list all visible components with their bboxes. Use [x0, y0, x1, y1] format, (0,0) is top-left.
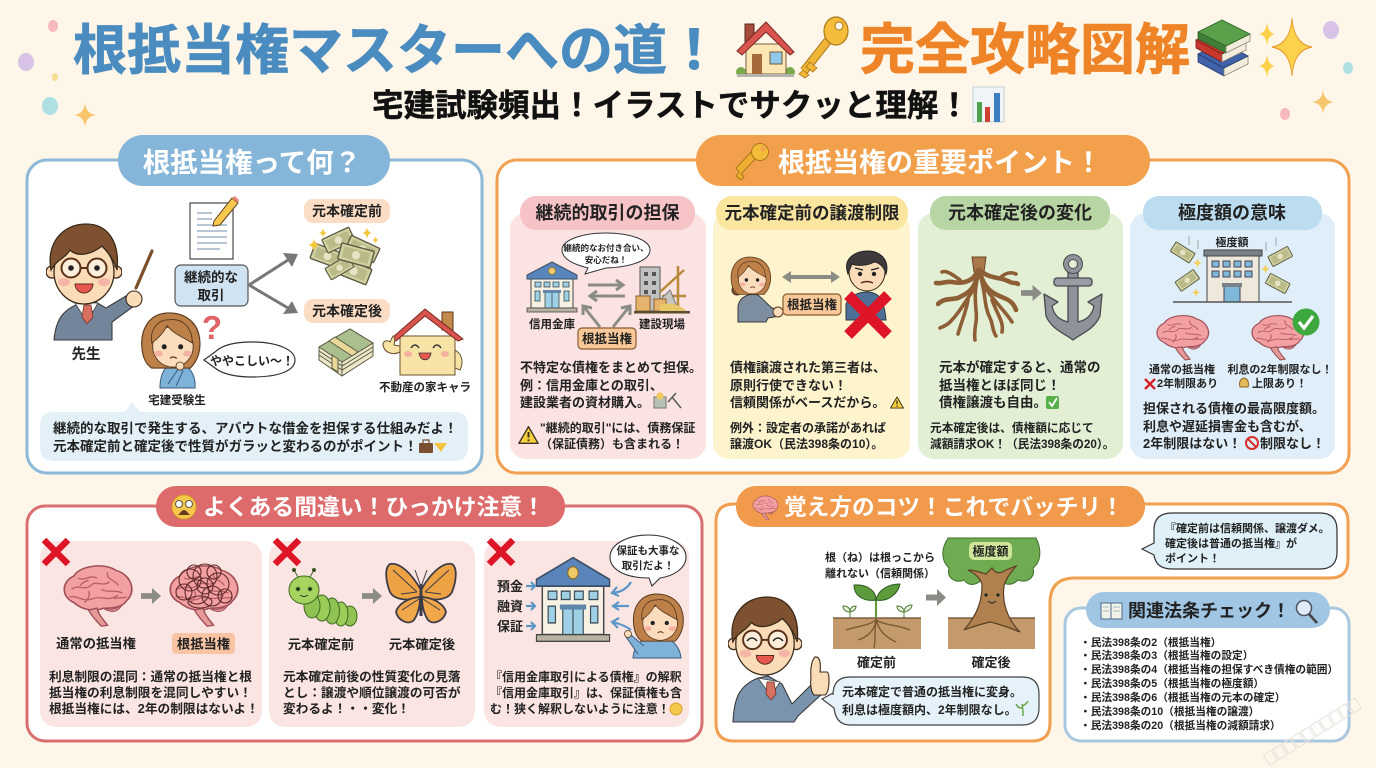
watermark	[1263, 698, 1361, 765]
background decorations: dots and stars	[18, 20, 1353, 127]
icon: brain	[753, 496, 778, 520]
illustration: seedling	[833, 584, 921, 670]
comparison labels: 利息の2年制限なし！	[1227, 362, 1333, 376]
speech bubble: 安心だね！	[585, 255, 627, 265]
icon: sparkles	[1259, 18, 1312, 78]
character: house mascot	[379, 309, 471, 394]
icon: warning	[891, 397, 903, 408]
labels: deposit, loan, guarantee: 保証	[497, 619, 523, 634]
panel: memory tips	[716, 486, 1348, 741]
panel: what is a revolving mortgage	[27, 135, 482, 473]
explanation callout: 元本確定前と確定後で性質がガラッと変わるのがポイント！	[53, 438, 418, 454]
icon: brain, normal	[1157, 316, 1209, 360]
law list: ・民法398条の2（根抵当権）	[1080, 636, 1221, 649]
card: security for continuous transactions: 信用金庫	[529, 317, 575, 331]
labels: deposit, loan, guarantee: 融資	[497, 599, 523, 614]
body text: 担保される債権の最高限度額。	[1143, 401, 1325, 416]
speech bubble: guarantee too: 保証も大事な	[616, 544, 680, 557]
label: after principal fixed	[304, 299, 390, 323]
arrow	[926, 589, 946, 606]
label: revolving mortgage	[578, 328, 636, 349]
body text: 『信用金庫取引』は、保証債権も含	[490, 685, 682, 700]
panel: key points	[497, 135, 1349, 473]
law list: ・民法398条の4（根抵当権の担保すべき債権の範囲）	[1080, 663, 1338, 676]
arrow	[1021, 285, 1042, 301]
label: revolving mortgage	[172, 633, 235, 654]
warning note: "継続的取引"には、債務保証	[540, 420, 695, 435]
label: mnemonic: 離れない（信頼関係）	[825, 566, 935, 580]
body text: とし：譲渡や順位譲渡の可否が	[283, 685, 461, 700]
title	[73, 17, 1312, 81]
character: confused student	[142, 309, 222, 407]
icon: books	[1196, 20, 1250, 76]
body text	[49, 669, 259, 716]
body text	[490, 669, 682, 716]
card: meaning of maximum amount: 極度額の意味	[1178, 203, 1286, 223]
card: interest limit confusion	[40, 540, 262, 727]
teacher with pointer: 先生	[72, 346, 100, 363]
card: change after principal fixed: 元本確定後の変化	[948, 203, 1092, 223]
icon: butterfly	[386, 564, 456, 622]
illustration: seedling: 確定前	[857, 655, 896, 670]
speech bubble: guarantee too: 取引だよ！	[622, 559, 674, 572]
card: transfer limits before principal fixed: 元本確定前の譲渡制限	[724, 203, 900, 223]
body text: 根抵当権には、2年の制限はないよ！	[49, 701, 259, 716]
body text: 抵当権とほぼ同じ！	[939, 377, 1060, 393]
icon: construction site	[634, 266, 690, 314]
card: scope of credit union transactions	[484, 535, 689, 727]
subtitle: 宅建試験頻出！イラストでサクッと理解！	[372, 87, 970, 123]
illustration: big tree: 確定後	[971, 655, 1011, 670]
exception note: 例外：設定者の承諾があれば	[730, 420, 886, 435]
icon: open book	[1101, 603, 1122, 619]
heading pill	[118, 135, 390, 186]
title: 根抵当権マスターへの道！	[73, 21, 721, 81]
labels: deposit, loan, guarantee	[497, 579, 523, 634]
heading pill: 根抵当権って何？	[143, 147, 361, 178]
label: before principal fixed	[304, 199, 390, 223]
body text: 元本確定前後の性質変化の見落	[283, 669, 461, 684]
icon: magnifier	[1296, 600, 1317, 623]
body text: 2年制限はない！	[1143, 436, 1241, 451]
title: 完全攻略図解	[860, 19, 1190, 81]
law list: ・民法398条の3（根抵当権の設定）	[1080, 649, 1253, 662]
card: change after principal fixed	[918, 196, 1123, 459]
warning note	[519, 420, 695, 451]
icon: bank and pickaxe	[654, 392, 681, 408]
body text: 『信用金庫取引による債権』の解釈	[490, 669, 682, 684]
heading pill	[156, 486, 565, 527]
speech bubble: so confusing: ややこしい〜！	[210, 354, 294, 368]
speech bubble: 継続的なお付き合い、	[563, 243, 649, 253]
icon: bank	[536, 558, 610, 641]
icon: prohibited	[1246, 437, 1258, 449]
explanation callout: 継続的な取引で発生する、アバウトな借金を担保する仕組みだよ！	[53, 420, 457, 436]
comparison labels	[1145, 362, 1333, 390]
arrow	[141, 588, 161, 604]
icon: brain with check	[1252, 308, 1320, 360]
arrows: into bank	[526, 582, 631, 630]
label: before principal fixed: 元本確定前	[312, 203, 382, 219]
arrows: split into before and after	[249, 253, 298, 314]
icon: caterpillar	[289, 568, 357, 626]
box: continuous transactions	[175, 265, 248, 306]
icon: key	[799, 17, 848, 78]
label: revolving mortgage: 根抵当権	[582, 331, 632, 346]
card: transfer limits before principal fixed	[713, 196, 910, 459]
body text: 原則行使できない！	[730, 378, 847, 393]
body text: 建設業者の資材購入。	[520, 395, 650, 410]
card: security for continuous transactions: 建設現場	[639, 317, 685, 331]
card: meaning of maximum amount	[1130, 196, 1335, 459]
arrows: two-way	[588, 280, 625, 301]
body text: 債権譲渡も自由。	[939, 394, 1047, 410]
icon: red X	[44, 540, 68, 564]
body text	[520, 360, 702, 410]
heading pill: 根抵当権の重要ポイント！	[778, 148, 1102, 178]
comparison labels: 通常の抵当権	[1149, 362, 1215, 376]
icon: roots	[936, 257, 1018, 340]
note text: 減額請求OK！（民法398条の20）。	[930, 437, 1114, 451]
icon: stack of banknotes	[319, 329, 373, 376]
speech bubble	[562, 233, 650, 274]
heading pill	[696, 135, 1150, 186]
body text	[730, 360, 886, 410]
speech bubble: teacher summary: 元本確定で普通の抵当権に変身。	[842, 684, 1022, 699]
icon: key	[736, 144, 768, 180]
speech bubble: so confusing	[204, 342, 295, 377]
teacher thumbs up	[728, 597, 829, 722]
label: maximum amount: 極度額	[972, 544, 1009, 558]
warning note: （保証債務）も含まれる！	[540, 436, 684, 451]
note text: 元本確定後は、債権額に応じて	[930, 421, 1094, 435]
body text: 利息制限の混同：通常の抵当権と根	[49, 669, 252, 684]
icon: anchor	[1044, 254, 1102, 340]
speech bubble: key point	[1142, 513, 1337, 569]
speech bubble: teacher summary: 利息は極度額内、2年制限なし。	[842, 702, 1017, 717]
box: continuous transactions: 継続的な	[184, 269, 238, 285]
card: overlooking change of nature: 元本確定後	[389, 636, 456, 652]
character: confused student: ?	[202, 309, 222, 346]
body text	[283, 669, 461, 716]
icon: briefcase and handshake	[419, 440, 447, 453]
character: student pointing	[624, 594, 683, 658]
speech bubble: key point: 確定後は普通の抵当権』が	[1165, 536, 1297, 550]
label: mnemonic: 根（ね）は根っこから	[825, 551, 935, 564]
law list	[1080, 636, 1338, 732]
character: man	[846, 251, 887, 320]
icon: tangled brain	[170, 564, 238, 626]
body text: 信頼関係がベースだから。	[730, 395, 885, 410]
icon: house	[736, 22, 795, 77]
speech bubble: teacher summary	[822, 677, 1039, 725]
body text: 例：信用金庫との取引、	[520, 378, 663, 393]
character: woman	[731, 257, 783, 322]
exception note: 譲渡OK（民法398条の10）。	[730, 436, 883, 451]
card: overlooking change of nature: 元本確定前	[288, 636, 354, 652]
law list: ・民法398条の20（根抵当権の減額請求）	[1080, 719, 1281, 732]
label: mnemonic	[825, 551, 935, 580]
arrow	[362, 588, 382, 604]
heading pill: 関連法条チェック！	[1128, 601, 1290, 621]
panel: related law articles	[1065, 592, 1349, 741]
explanation callout	[40, 402, 468, 461]
icon: red X	[848, 295, 888, 335]
arrow: two-way	[782, 271, 840, 283]
body text: 元本が確定すると、通常の	[939, 359, 1100, 375]
label: revolving mortgage	[783, 294, 841, 315]
heading pill	[1086, 592, 1330, 628]
icon: bar chart	[973, 87, 1004, 122]
label: after principal fixed: 元本確定後	[312, 303, 382, 319]
icon: scattered banknotes	[308, 227, 380, 285]
icon: credit union	[527, 262, 577, 312]
exception note	[730, 420, 886, 451]
icon: red X	[489, 540, 513, 564]
card: interest limit confusion: 通常の抵当権	[56, 635, 136, 651]
box: continuous transactions: 取引	[198, 288, 224, 303]
note text	[930, 421, 1114, 451]
arrows: mortgage to both parties	[583, 306, 630, 327]
body text	[1143, 401, 1325, 451]
heading pill: 覚え方のコツ！これでバッチリ！	[784, 494, 1124, 520]
icon: document and pencil	[190, 196, 239, 259]
law list: ・民法398条の5（根抵当権の極度額）	[1080, 677, 1264, 690]
panel: common mistakes	[27, 486, 702, 741]
body text: 不特定な債権をまとめて担保。	[520, 360, 702, 375]
body text: 利息や遅延損害金も含むが、	[1143, 419, 1312, 434]
speech bubble: guarantee too	[610, 535, 686, 586]
speech bubble: key point: ポイント！	[1165, 552, 1220, 565]
illustration: big tree	[943, 538, 1040, 670]
card: security for continuous transactions	[510, 196, 706, 459]
icon: worried face	[172, 495, 196, 519]
label: revolving mortgage: 根抵当権	[787, 297, 837, 312]
character: confused student: 宅建受験生	[148, 393, 206, 407]
law list: ・民法398条の10（根抵当権の譲渡）	[1080, 705, 1259, 718]
body text	[939, 359, 1100, 410]
icon: green check box	[1046, 396, 1059, 409]
body text: む！狭く解釈しないように注意！	[490, 701, 670, 716]
character: house mascot: 不動産の家キャラ	[379, 380, 471, 394]
card: security for continuous transactions: 継続的取引の担保	[536, 202, 680, 223]
card: meaning of maximum amount: 極度額	[1216, 235, 1248, 249]
speech bubble: key point: 『確定前は信頼関係、譲渡ダメ。	[1165, 521, 1330, 535]
labels: deposit, loan, guarantee: 預金	[497, 579, 523, 594]
label: revolving mortgage: 根抵当権	[177, 636, 230, 652]
icon: emoji	[670, 703, 682, 715]
icon: brain	[64, 566, 132, 626]
body text: 抵当権の利息制限を混同しやすい！	[49, 685, 252, 700]
body text: 制限なし！	[1260, 436, 1325, 451]
body text: 債権譲渡された第三者は、	[730, 360, 886, 375]
law list: ・民法398条の6（根抵当権の元本の確定）	[1080, 691, 1285, 704]
card: overlooking change of nature	[269, 540, 475, 727]
teacher with pointer	[46, 224, 152, 363]
icon: building and banknotes	[1170, 236, 1293, 302]
body text: 変わるよ！・・変化！	[283, 701, 410, 716]
icon: red X	[275, 540, 299, 564]
comparison labels: 2年制限あり	[1157, 376, 1218, 390]
comparison labels: 上限あり！	[1252, 377, 1307, 390]
heading pill: よくある間違い！ひっかけ注意！	[203, 494, 545, 520]
heading pill	[736, 486, 1145, 527]
